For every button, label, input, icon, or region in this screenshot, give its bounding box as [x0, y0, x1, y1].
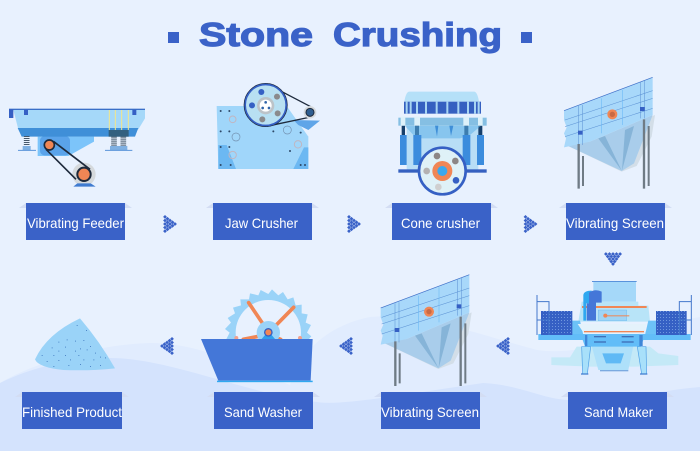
arrow left 1	[160, 337, 174, 355]
label: sand washer: Sand Washer	[224, 404, 302, 420]
label: jaw crusher: Jaw Crusher	[225, 215, 298, 231]
machine: jaw crusher	[217, 83, 320, 169]
label: cone crusher	[385, 203, 498, 240]
arrow right 2	[347, 215, 361, 233]
machine: vibrating screen 1	[564, 77, 655, 189]
title	[168, 16, 532, 53]
label: vibrating feeder: Vibrating Feeder	[27, 215, 124, 231]
machine: vibrating screen 2	[381, 275, 472, 386]
label: vibrating feeder	[19, 203, 132, 240]
title decoration right	[521, 32, 532, 43]
label: finished product	[15, 392, 129, 429]
label: vibrating screen 2	[374, 392, 487, 429]
label: vibrating screen 1	[559, 203, 672, 240]
arrow right 1	[163, 215, 177, 233]
title word: Stone: Stone	[199, 16, 313, 53]
arrow down	[604, 252, 622, 266]
title decoration left	[168, 32, 179, 43]
label: sand washer	[207, 392, 320, 429]
machine: sand washer	[201, 289, 313, 382]
label: cone crusher: Cone crusher	[401, 215, 480, 231]
arrow left 3	[496, 337, 510, 355]
label: jaw crusher	[206, 203, 319, 240]
machine: sand maker	[537, 281, 691, 375]
arrow right 3	[524, 215, 537, 233]
title word: Crushing: Crushing	[333, 16, 502, 53]
label: vibrating screen 2: Vibrating Screen	[381, 404, 479, 420]
label: sand maker	[561, 392, 674, 429]
label: sand maker: Sand Maker	[584, 404, 653, 420]
machine: vibrating feeder	[9, 109, 145, 187]
arrow left 2	[339, 337, 353, 355]
label: finished product: Finished Product	[22, 404, 122, 420]
machine: cone crusher	[398, 92, 487, 194]
finished product pile	[35, 318, 115, 370]
label: vibrating screen 1: Vibrating Screen	[566, 215, 664, 231]
